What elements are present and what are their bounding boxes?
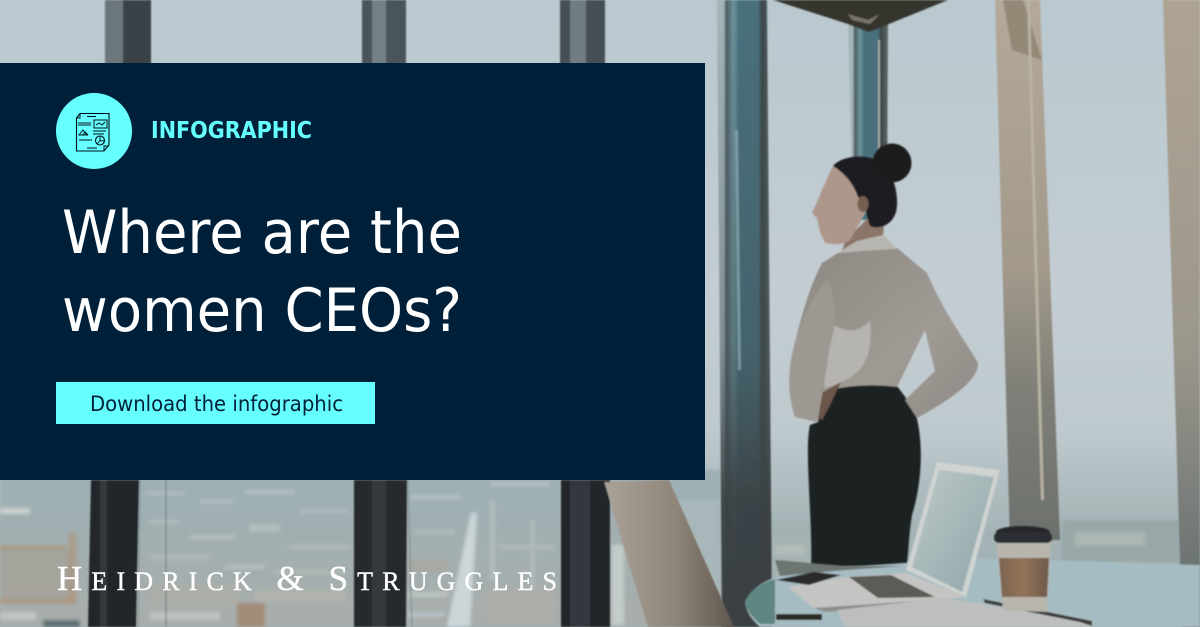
icon: infographic document in circle [56, 93, 132, 169]
laptop base [788, 573, 966, 608]
pen [776, 614, 822, 620]
laptop screen [906, 462, 1000, 597]
button: download [56, 382, 375, 424]
photo: desk with laptop and coffee [604, 462, 1200, 627]
heading: women CEOs? [62, 276, 462, 346]
heading: Where are the [62, 198, 462, 268]
button: download: Download the infographic [90, 392, 343, 416]
ceiling corner [773, 0, 948, 32]
phone [776, 572, 841, 585]
coffee cup [996, 540, 1051, 612]
window column: centre corner frame [848, 22, 888, 220]
shirt highlight [824, 320, 871, 388]
hair [833, 156, 897, 227]
label: INFOGRAPHIC: INFOGRAPHIC [151, 118, 312, 144]
shirt sleeve shadow [789, 280, 835, 422]
logo: Heidrick & Struggles: H EIDRICK & S TRUGGLES [57, 559, 557, 598]
panel: dark title panel [0, 63, 705, 480]
hand on hip [818, 382, 841, 420]
face [812, 166, 870, 244]
notebook [837, 598, 1092, 627]
neck [842, 218, 884, 250]
heading [62, 198, 462, 346]
ear [858, 196, 868, 212]
shirt collar [838, 234, 897, 253]
window column: teal frame left of woman [717, 0, 772, 627]
hair bun [872, 144, 912, 182]
hazy city view [0, 470, 1180, 627]
photo: woman looking out of the window [789, 144, 978, 571]
window column: tan frame [995, 0, 1060, 540]
chair [604, 480, 734, 627]
glass table [745, 558, 1200, 627]
window columns: left side [88, 0, 610, 627]
skirt [808, 385, 921, 571]
window column: right edge [1163, 0, 1200, 627]
shirt [789, 248, 978, 422]
